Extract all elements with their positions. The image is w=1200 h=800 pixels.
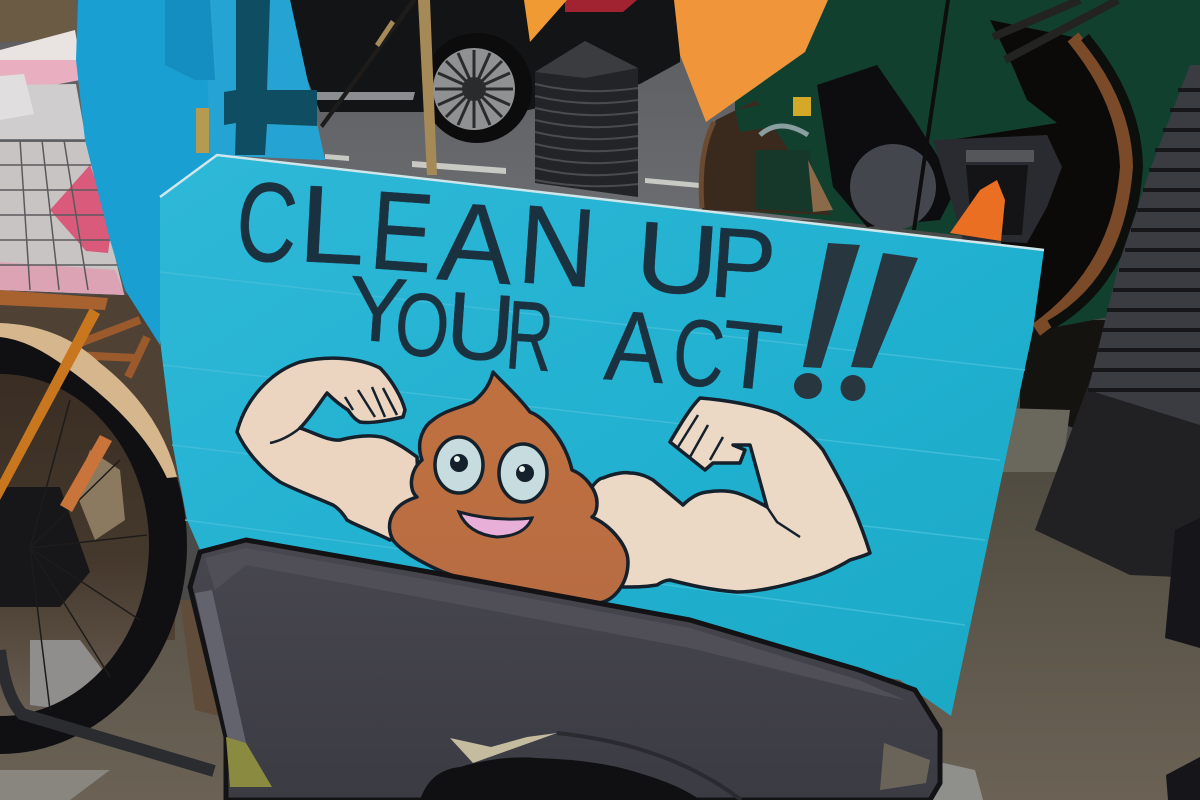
heading: clean up: L bbox=[296, 163, 369, 288]
basket with pink blanket bbox=[0, 30, 125, 295]
road markings bbox=[325, 154, 700, 188]
torn fabric bbox=[450, 733, 557, 763]
heading: your act bbox=[345, 257, 786, 412]
cables bbox=[993, 0, 1118, 60]
wheel interior bbox=[0, 371, 150, 719]
cargo trailer cover bbox=[190, 540, 940, 800]
toothed plate bbox=[933, 135, 1062, 243]
heading: your act: R bbox=[503, 280, 557, 392]
dark ground behind sign bbox=[1020, 320, 1200, 470]
tyre bbox=[0, 355, 168, 735]
blue tarp bbox=[76, 0, 325, 345]
trailer tyre bbox=[420, 757, 700, 800]
bicycle wheel bbox=[0, 290, 177, 735]
heading: your act: O bbox=[392, 274, 453, 378]
heading: your act: Y bbox=[345, 257, 410, 363]
cover top band bbox=[205, 548, 905, 700]
heading: your act: C bbox=[670, 298, 728, 408]
exclamation marks bbox=[794, 243, 918, 401]
left fold bbox=[195, 590, 246, 743]
black bracket bbox=[817, 65, 957, 227]
heading: clean up: A bbox=[434, 178, 518, 308]
yellow warning plate bbox=[793, 97, 811, 116]
gold ferrule bbox=[196, 108, 209, 153]
rack shelf bbox=[0, 290, 108, 310]
heading: your act: U bbox=[443, 272, 518, 383]
poo emoji bbox=[390, 372, 628, 603]
wheel arch line bbox=[557, 733, 741, 800]
black ribbed cone bbox=[1035, 65, 1200, 578]
yellow-green stain bbox=[226, 737, 272, 787]
heading: clean up: E bbox=[366, 166, 438, 296]
fingers and crease bbox=[678, 415, 800, 537]
heading: clean up: P bbox=[707, 205, 780, 322]
mouth bbox=[459, 512, 532, 537]
black car bbox=[290, 0, 680, 143]
black drum interior bbox=[950, 20, 1127, 330]
heading: clean up: N bbox=[514, 182, 600, 312]
orange flags bbox=[524, 0, 1005, 241]
rear rack struts bbox=[73, 320, 147, 377]
kerb bbox=[1002, 408, 1070, 472]
steel ring bbox=[760, 126, 808, 135]
green body bbox=[735, 0, 1200, 330]
left background bbox=[0, 0, 76, 42]
heading: clean up: C bbox=[232, 158, 302, 288]
heading: clean up bbox=[232, 158, 780, 322]
wooden pole and black stick bbox=[320, 0, 437, 175]
dark cross bbox=[224, 0, 317, 155]
road bbox=[0, 0, 1200, 220]
right arm bbox=[590, 398, 870, 592]
wet pavement patch bbox=[923, 760, 983, 800]
right worn patch bbox=[880, 743, 930, 790]
fender bbox=[0, 323, 177, 478]
fingers and crease bbox=[270, 387, 397, 443]
drive disc bbox=[850, 144, 936, 230]
heading: your act: T bbox=[716, 301, 786, 412]
orange tube bbox=[0, 308, 100, 500]
left arm bbox=[237, 358, 420, 540]
dark object far right bbox=[1165, 518, 1200, 800]
trailer frame bar bbox=[0, 650, 214, 771]
board edge highlight bbox=[160, 155, 1044, 250]
painted sign board bbox=[160, 155, 1044, 716]
left drum bbox=[701, 100, 831, 215]
heading: your act: A bbox=[601, 290, 670, 405]
plank seams bbox=[160, 272, 1025, 625]
eyes bbox=[435, 437, 483, 493]
spokes bbox=[30, 400, 147, 710]
cassette bbox=[0, 487, 90, 607]
pavement bbox=[0, 420, 1200, 800]
black rod bbox=[912, 0, 950, 230]
heading: clean up: U bbox=[632, 200, 723, 317]
road roller bbox=[701, 0, 1200, 330]
bollard bbox=[535, 41, 638, 197]
